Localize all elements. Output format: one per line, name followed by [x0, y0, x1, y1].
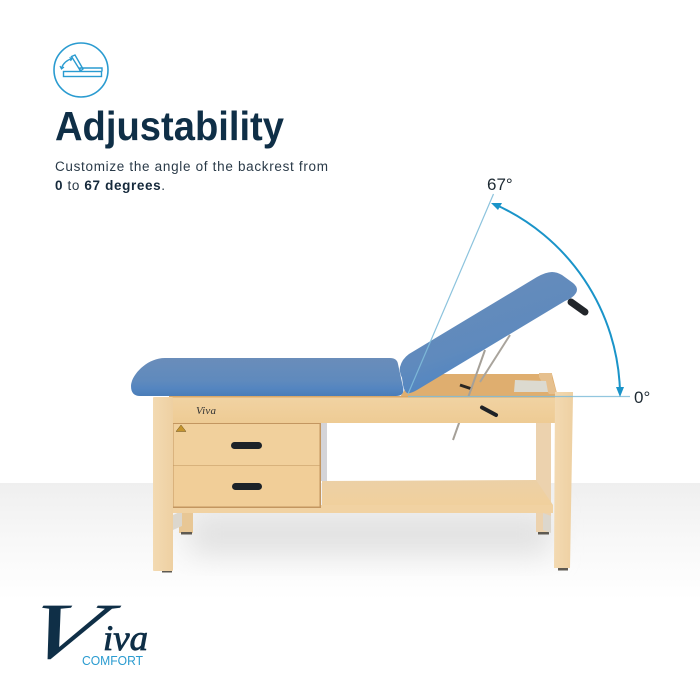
front right leg	[554, 392, 573, 568]
label 67 degrees: 67°	[487, 175, 513, 194]
label 0 degrees: 0°	[634, 388, 650, 407]
lock mechanism	[460, 385, 472, 389]
script wordmark: V	[10, 587, 129, 676]
brand logo	[10, 587, 148, 676]
description text: 0 to 67 degrees.	[55, 178, 165, 193]
title: Adjustability	[55, 103, 284, 149]
icon: adjustable table in circle	[54, 43, 108, 97]
tray back post	[539, 373, 557, 394]
tray interior	[400, 374, 558, 397]
comfort text: COMFORT	[82, 654, 143, 668]
back left leg	[179, 512, 193, 533]
leg feet	[162, 532, 568, 572]
floor shadow under table	[190, 513, 550, 555]
description text: Customize the angle of the backrest from	[55, 159, 328, 174]
arrowhead top	[491, 203, 502, 210]
warning label	[176, 425, 186, 432]
front left leg	[153, 397, 173, 571]
mechanism bracket	[514, 380, 548, 392]
back right leg	[536, 420, 551, 532]
shelf front edge	[173, 505, 553, 513]
angle arc	[494, 204, 620, 392]
shelf top	[322, 480, 553, 507]
crank handle	[482, 408, 496, 415]
backrest handle	[571, 302, 585, 312]
drawer side panel	[320, 423, 327, 481]
support rods	[480, 335, 510, 382]
drawer unit	[173, 423, 321, 508]
drawer handles	[231, 442, 262, 449]
seat cushion	[131, 358, 403, 396]
script wordmark continued: iva	[103, 618, 148, 658]
apron logo: Viva	[196, 405, 216, 417]
floor background	[0, 483, 700, 600]
hinge brackets	[173, 511, 551, 533]
arrowhead bottom	[616, 387, 624, 397]
0 degree line	[408, 396, 630, 398]
backrest cushion	[400, 272, 577, 393]
description text	[55, 159, 328, 193]
67 degree line	[408, 194, 494, 394]
front apron	[169, 396, 557, 423]
massage table	[131, 272, 585, 572]
angle annotation	[408, 175, 650, 407]
